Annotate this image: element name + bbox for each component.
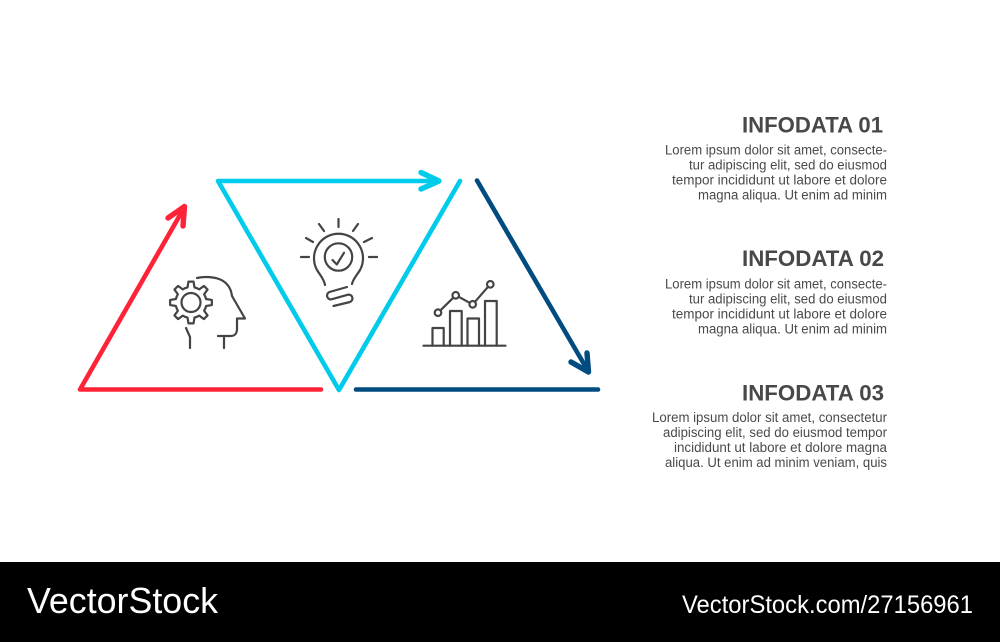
body: infodata 02: Lorem ipsum dolor sit amet, consecte-	[665, 276, 887, 292]
body: infodata 02: tur adipiscing elit, sed do eiusmod	[689, 292, 887, 306]
icon: bar chart with trend line	[424, 281, 506, 346]
body: infodata 03: Lorem ipsum dolor sit amet, consectetur	[652, 410, 887, 425]
heading: infodata 01: INFODATA 01	[742, 112, 883, 138]
body: infodata 01: tur adipiscing elit, sed do eiusmod	[689, 158, 887, 172]
footer logo text: VectorStock	[27, 580, 219, 621]
red triangle arrow	[80, 206, 321, 390]
cyan triangle arrow	[218, 172, 460, 390]
text block: infodata 03	[652, 380, 887, 470]
dark blue triangle arrow	[356, 180, 598, 390]
body: infodata 01	[665, 142, 887, 202]
body: infodata 02	[665, 276, 887, 336]
heading: infodata 03: INFODATA 03	[742, 380, 884, 406]
body: infodata 02: magna aliqua. Ut enim ad minim	[698, 322, 887, 336]
heading: infodata 02: INFODATA 02	[742, 246, 884, 271]
footer url text: VectorStock.com/27156961	[682, 591, 973, 619]
body: infodata 03: aliqua. Ut enim ad minim veniam, quis	[665, 455, 887, 470]
body: infodata 01: Lorem ipsum dolor sit amet, consecte-	[665, 142, 887, 158]
body: infodata 03: adipiscing elit, sed do eiusmod tempor	[663, 425, 887, 440]
footer bar	[0, 562, 1000, 642]
icon: light bulb with check	[301, 219, 377, 306]
body: infodata 02: tempor incididunt ut labore et dolore	[672, 306, 887, 322]
text block: infodata 01	[665, 112, 887, 202]
body: infodata 03: incididunt ut labore et dolore magna	[674, 440, 887, 455]
text block: infodata 02	[665, 246, 887, 336]
icon: head with gear	[170, 277, 245, 348]
body: infodata 01: tempor incididunt ut labore et dolore	[672, 172, 887, 188]
body: infodata 03	[652, 410, 887, 470]
body: infodata 01: magna aliqua. Ut enim ad minim	[698, 188, 887, 202]
